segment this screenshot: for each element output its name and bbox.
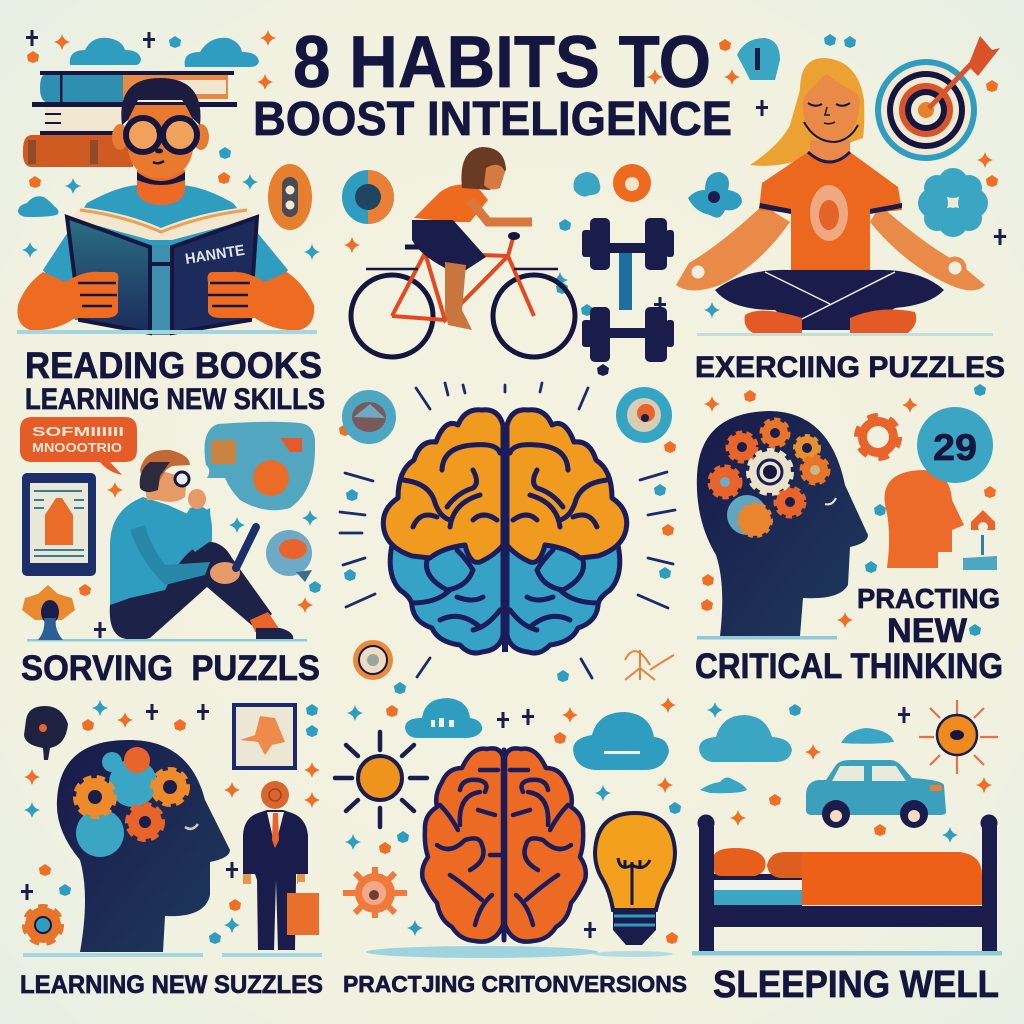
icon: orange medallion: [268, 164, 312, 230]
panel: critical thinking: [695, 407, 1003, 686]
meditating woman: [676, 58, 985, 335]
ground line: [697, 333, 993, 336]
label: solving puzzles: SORVING PUZZLS: [21, 649, 320, 688]
orange head: [884, 470, 964, 568]
label: practing new critical thinking: [695, 583, 1003, 686]
left hemisphere: [383, 410, 503, 653]
bicycle: [351, 232, 575, 357]
label: learning new skills: LEARNING NEW SKILLS: [25, 383, 325, 416]
cyclist: [412, 147, 532, 330]
icon: gear: [858, 417, 898, 457]
ground shadow: [366, 946, 598, 958]
speech bubble: SOFMIIIIII: [32, 424, 124, 439]
icon: stacked books: [23, 71, 237, 167]
ground line: [27, 639, 307, 642]
blue note icon: [737, 38, 780, 80]
title: 8 HABITS TO: [293, 22, 711, 103]
number badge: [917, 407, 993, 483]
clouds: [699, 715, 894, 793]
number badge: 29: [933, 427, 977, 468]
icon: orange petal: [22, 585, 75, 640]
icon: blue flower: [918, 168, 988, 237]
orange brain: [422, 748, 586, 942]
icon: dumbbells: [582, 218, 674, 362]
icon: framed picture: [234, 705, 295, 768]
clouds: [405, 698, 669, 770]
thinking man: [110, 450, 293, 640]
reader figure: [18, 78, 314, 335]
ground line: [692, 951, 1002, 956]
speech bubble: MNOOOTRIO: [32, 440, 122, 455]
head silhouette with flowers: [57, 740, 230, 952]
bed: [698, 814, 998, 952]
panel: learning new: [20, 705, 323, 999]
title: [253, 22, 732, 146]
panel: reading books: [17, 38, 322, 386]
small round icons: [342, 164, 742, 224]
label: practing new critical thinking: NEW: [887, 612, 968, 650]
label: learning new suzzles: LEARNING NEW SUZZLES: [20, 971, 323, 999]
icon: dark blob: [24, 706, 68, 760]
central brain: [340, 383, 675, 678]
icon: sun: [335, 732, 427, 827]
label: practicing conversations: PRACTJING CRITONVERSIONS: [343, 971, 687, 997]
title: BOOST INTELIGENCE: [253, 93, 732, 146]
panel: exercising: [342, 147, 742, 362]
ground shadow right: [593, 951, 673, 957]
label: sleeping well: SLEEPING WELL: [713, 964, 999, 1006]
car: [806, 760, 946, 828]
panel: sleeping well: [692, 700, 1002, 1006]
reader figure: HANNTE: [184, 242, 246, 268]
panel: practicing conversations: [335, 698, 687, 997]
businessman: [243, 781, 319, 950]
icon: gear: [343, 867, 407, 918]
skull icon: [266, 530, 312, 582]
label: exercising puzzles: EXERCIING PUZZLES: [695, 351, 1005, 384]
clouds: [18, 38, 259, 217]
rays: [340, 383, 675, 678]
panel: solving puzzles: [20, 417, 320, 688]
icon: light bulb: [595, 813, 675, 945]
small round icons around brain: [342, 387, 674, 680]
icon: house sign: [963, 510, 997, 570]
panel: meditation: [676, 36, 1005, 384]
speech bubble: [20, 417, 137, 475]
icon: orange gear: [25, 907, 61, 943]
head silhouette with gears: [697, 411, 868, 636]
ground line: [17, 330, 317, 334]
ground line: [697, 636, 837, 640]
icon: tablet: [22, 473, 96, 576]
icon: sun: [919, 700, 998, 774]
midline: [502, 425, 508, 652]
right hemisphere: [507, 410, 627, 653]
cloud text: [431, 718, 640, 754]
label: practing new critical thinking: PRACTING: [857, 583, 1000, 614]
label: reading books: READING BOOKS: [25, 345, 322, 386]
icon: target with arrow: [875, 36, 1000, 161]
thought bubble: [204, 422, 315, 510]
ground lines: [23, 953, 322, 957]
